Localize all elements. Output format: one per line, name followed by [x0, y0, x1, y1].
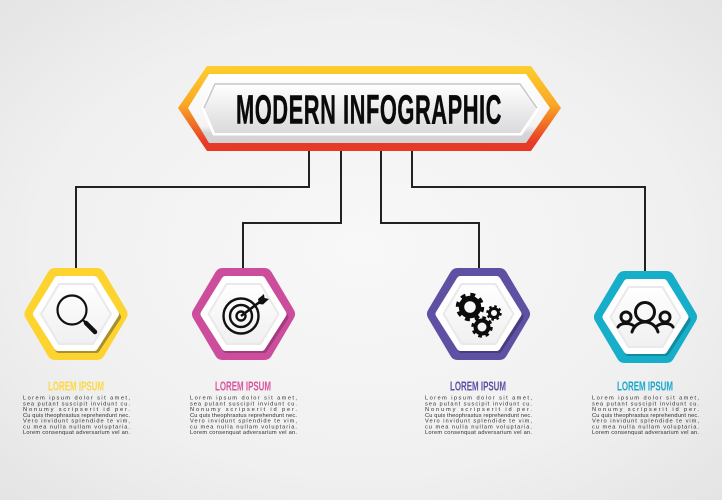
body text: Vero invidunt splendide te vim,	[425, 419, 532, 425]
icon: people	[618, 302, 673, 332]
body text: Nonumy scripserit id per.	[425, 407, 532, 413]
body text	[23, 396, 130, 436]
body text: sea putant suscipit invidunt cu.	[23, 401, 130, 407]
body text: Lorem consenquat adversarium vel an.	[425, 430, 532, 436]
label: LOREM IPSUM	[450, 378, 506, 394]
connector lines	[76, 148, 645, 273]
body text: Vero invidunt splendide te vim,	[190, 419, 297, 425]
body text: Lorem consenquat adversarium vel an.	[23, 430, 130, 436]
hexagon: yellow	[32, 276, 120, 352]
body text: Nonumy scripserit id per.	[23, 407, 130, 413]
item 2: target	[190, 276, 297, 436]
body text	[592, 396, 699, 436]
label: LOREM IPSUM	[617, 378, 673, 394]
item 1: search	[23, 276, 130, 436]
body text: Lorem ipsum dolor sit amet,	[592, 396, 699, 402]
body text: sea putant suscipit invidunt cu.	[190, 401, 297, 407]
body text	[425, 396, 532, 436]
item 3: gears	[425, 276, 532, 436]
body text: Vero invidunt splendide te vim,	[592, 419, 699, 425]
title banner	[178, 66, 561, 151]
body text: sea putant suscipit invidunt cu.	[425, 401, 532, 407]
body text: Cu quis theophrastus reprehendunt nec.	[425, 413, 532, 419]
icon: magnifying glass	[58, 296, 95, 332]
label: LOREM IPSUM	[48, 378, 104, 394]
label: LOREM IPSUM	[215, 378, 271, 394]
body text: cu mea nulla nullam voluptaria.	[23, 424, 130, 430]
hexagon: purple	[435, 276, 522, 352]
body text	[190, 396, 297, 436]
title: MODERN INFOGRAPHIC	[236, 86, 502, 132]
hexagon: cyan	[602, 279, 689, 355]
body text: Cu quis theophrastus reprehendunt nec.	[23, 413, 130, 419]
body text: sea putant suscipit invidunt cu.	[592, 401, 699, 407]
body text: Lorem ipsum dolor sit amet,	[425, 396, 532, 402]
icon: target with arrow	[224, 294, 269, 334]
item 4: team	[592, 279, 699, 436]
body text: cu mea nulla nullam voluptaria.	[425, 424, 532, 430]
body text: cu mea nulla nullam voluptaria.	[592, 424, 699, 430]
body text: Cu quis theophrastus reprehendunt nec.	[592, 413, 699, 419]
hexagon: pink	[200, 276, 287, 352]
body text: cu mea nulla nullam voluptaria.	[190, 424, 297, 430]
body text: Lorem consenquat adversarium vel an.	[592, 430, 699, 436]
body text: Cu quis theophrastus reprehendunt nec.	[190, 413, 297, 419]
body text: Lorem consenquat adversarium vel an.	[190, 430, 297, 436]
body text: Lorem ipsum dolor sit amet,	[190, 396, 297, 402]
body text: Nonumy scripserit id per.	[592, 407, 699, 413]
body text: Nonumy scripserit id per.	[190, 407, 297, 413]
body text: Lorem ipsum dolor sit amet,	[23, 396, 130, 402]
icon: gears	[458, 295, 500, 336]
body text: Vero invidunt splendide te vim,	[23, 419, 130, 425]
